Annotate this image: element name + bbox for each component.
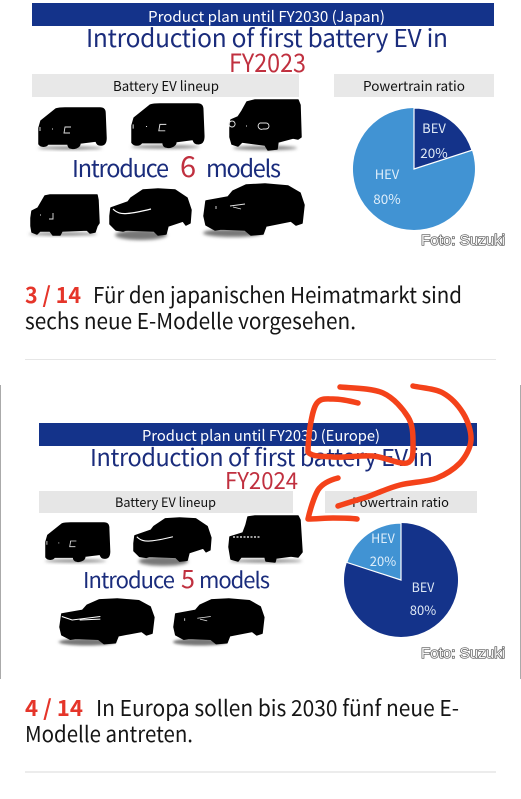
red arrow pointing to lineup (338, 386, 471, 506)
heading: Powertrain ratio: Powertrain ratio (363, 75, 465, 95)
header bar: Europe: Product plan until FY2030 (Europe) (142, 425, 380, 446)
pie chart: Europe powertrain ratio (344, 523, 458, 637)
pie chart: Europe powertrain ratio: 20% (370, 551, 396, 570)
title: Japan: Introduction of first battery EV in (86, 20, 448, 55)
car silhouette 4 (59, 599, 154, 646)
text: Introduce 6 models: 6 (180, 144, 196, 186)
car lineup: Japan (29, 100, 304, 240)
caption: slide 4 of 14 (25, 691, 459, 749)
heading: Battery EV lineup (39, 491, 293, 513)
car silhouette 3 (229, 100, 301, 150)
car silhouette 5 (110, 189, 191, 240)
pie chart: Japan powertrain ratio: BEV (422, 118, 446, 137)
car silhouette 3 (229, 516, 302, 562)
photo credit: Europe: Foto: Suzuki (421, 646, 505, 662)
pie chart: Japan powertrain ratio: 80% (373, 188, 401, 208)
title: Europe (90, 439, 433, 496)
title: Japan: FY2023 (229, 44, 306, 80)
car silhouette 1 (45, 523, 110, 562)
heading: Battery EV lineup: Battery EV lineup (115, 492, 216, 511)
text: Introduce 5 models: Introduce (83, 563, 175, 595)
heading: Battery EV lineup: Battery EV lineup (113, 75, 219, 95)
text: Introduce 5 models: 5 (181, 560, 195, 596)
text: Introduce 5 models (83, 560, 270, 596)
header bar: Japan (32, 3, 494, 27)
pie chart: Japan powertrain ratio (353, 108, 475, 230)
pie chart: Europe powertrain ratio: BEV (412, 577, 435, 596)
red circle around Europe (308, 387, 413, 463)
heading: Powertrain ratio (334, 74, 494, 97)
header bar: Japan: Product plan until FY2030 (Japan) (148, 6, 385, 27)
caption: slide 4 of 14: 4 / 14 (25, 691, 83, 723)
pie chart: Japan powertrain ratio: 20% (420, 142, 448, 162)
text: Introduce 6 models (72, 144, 281, 186)
caption: slide 3 of 14: 3 / 14 (25, 278, 81, 310)
heading: Powertrain ratio: Powertrain ratio (352, 492, 449, 511)
pie chart: Japan powertrain ratio: HEV (375, 164, 400, 183)
title: Europe: FY2024 (225, 462, 298, 496)
caption: slide 3 of 14: sechs neue E-Modelle vorgesehen. (25, 304, 356, 336)
red arrow head (308, 478, 357, 519)
car lineup: Europe (45, 516, 302, 646)
car silhouette 5 (173, 599, 264, 646)
car silhouette 1 (38, 108, 106, 150)
title: Europe: Introduction of first battery EV in (90, 439, 433, 473)
panel: Japan slide (29, 3, 505, 249)
caption: slide 4 of 14: In Europa sollen bis 2030 fünf neue E- (96, 691, 459, 723)
heading: Powertrain ratio (325, 491, 477, 513)
caption: slide 4 of 14: Modelle antreten. (25, 717, 193, 749)
car silhouette 2 (134, 518, 211, 566)
pie chart: Europe powertrain ratio: 80% (410, 600, 436, 619)
hand-drawn red annotation (308, 386, 471, 519)
text: Introduce 5 models: models (199, 563, 270, 595)
car silhouette 4 (29, 195, 99, 236)
car silhouette 6 (203, 184, 304, 237)
car silhouette 2 (131, 104, 204, 148)
text: Introduce 6 models: models (206, 150, 281, 184)
photo credit: Japan: Foto: Suzuki (421, 233, 505, 249)
title: Japan (86, 20, 448, 80)
header bar: Europe (39, 423, 477, 446)
panel: Europe slide (0, 385, 521, 679)
heading: Battery EV lineup (32, 74, 299, 97)
caption: slide 3 of 14 (25, 278, 462, 336)
text: Introduce 6 models: Introduce (72, 150, 169, 184)
pie chart: Europe powertrain ratio: HEV (371, 528, 396, 547)
caption: slide 3 of 14: Für den japanischen Heimatmarkt sind (93, 278, 462, 310)
